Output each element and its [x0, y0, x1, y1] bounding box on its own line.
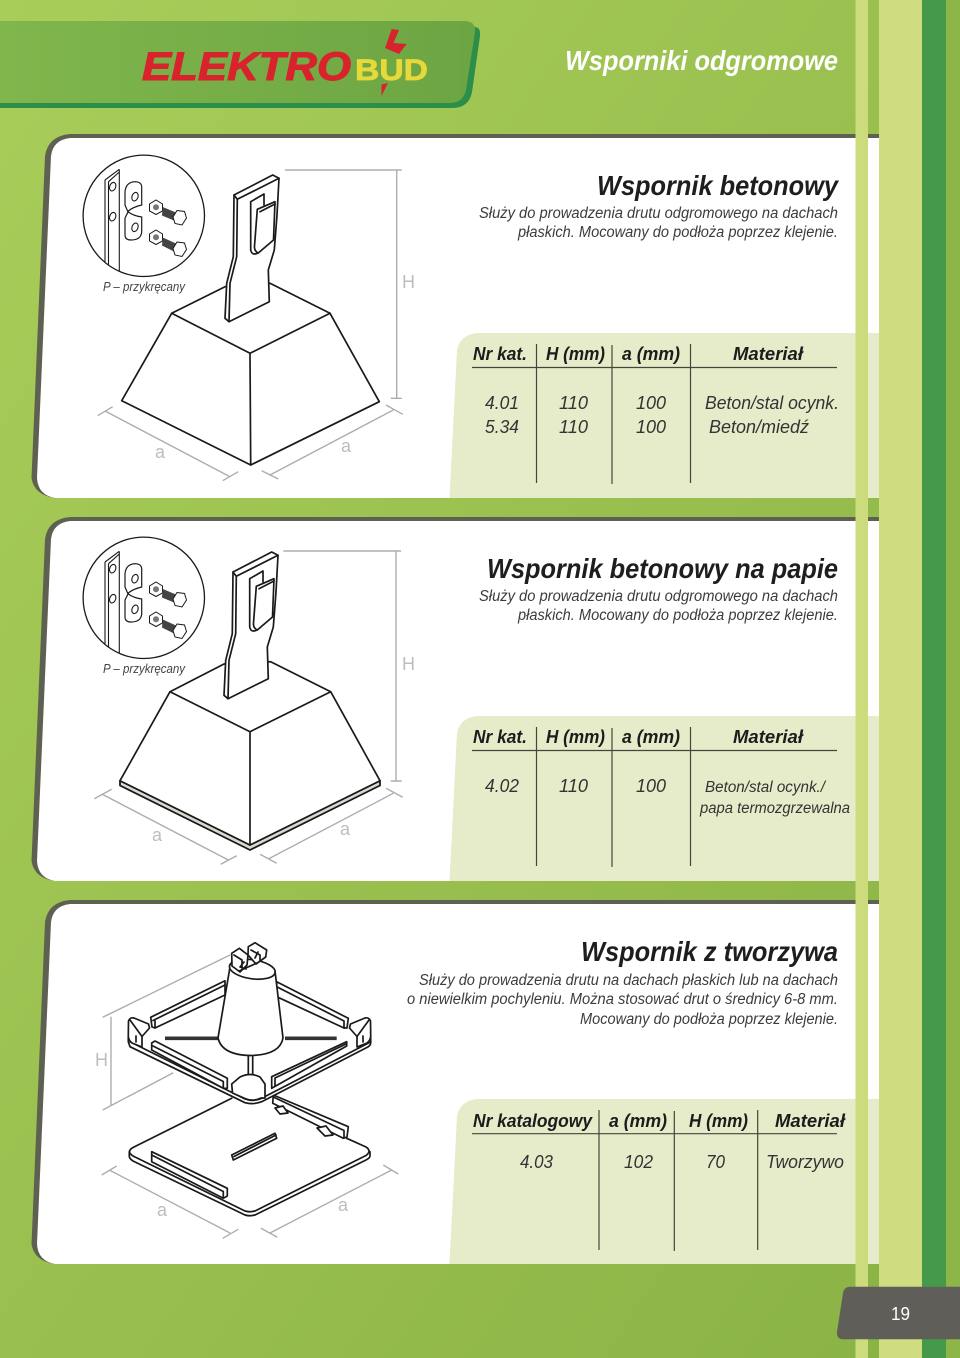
table 2: Materiał [733, 727, 804, 747]
table 1 [472, 344, 839, 484]
icon: mounting detail 2 [83, 537, 204, 658]
dimensions 1: a [341, 436, 352, 456]
table 2: H (mm) [546, 727, 605, 747]
dimensions 1 [98, 170, 415, 481]
panel: Wspornik betonowy na papie [32, 517, 879, 881]
dimensions 2 [94, 551, 415, 864]
table 2: 100 [636, 776, 666, 796]
rails of the frame [151, 981, 348, 1088]
table 3: 102 [624, 1152, 653, 1172]
table 1: Materiał [733, 344, 804, 364]
description 2: Służy do prowadzenia drutu odgromowego na dachach [479, 588, 838, 605]
drawing: concrete support [122, 175, 379, 465]
cone [218, 967, 283, 1056]
panel: Wspornik z tworzywa [32, 900, 879, 1264]
header band [0, 21, 480, 108]
table 3: 70 [706, 1152, 725, 1172]
table 2: Beton/stal ocynk./ [705, 779, 827, 796]
table 3: Tworzywo [766, 1152, 844, 1172]
dimensions 1: a [155, 442, 166, 462]
table 3 [472, 1110, 846, 1251]
table 2 [472, 727, 850, 867]
page number tab: 19 [891, 1303, 910, 1324]
corners of the frame [128, 1018, 371, 1047]
heading: Wspornik betonowy na papie: Wspornik betonowy na papie [487, 553, 838, 584]
description 1: płaskich. Mocowany do podłoża poprzez klejenie. [517, 224, 838, 241]
table 1: Nr kat. [473, 344, 527, 364]
table 2: papa termozgrzewalna [699, 800, 850, 817]
table 2: Nr kat. [473, 727, 527, 747]
table background 2 [450, 716, 879, 881]
description 2: płaskich. Mocowany do podłoża poprzez klejenie. [517, 607, 838, 624]
cone head [228, 943, 276, 982]
table 1: 5.34 [485, 417, 519, 437]
table 1: 4.01 [485, 393, 519, 413]
table 1: a (mm) [622, 344, 680, 364]
table background 3 [450, 1099, 879, 1264]
description 3: Służy do prowadzenia drutu na dachach płaskich lub na dachach [419, 972, 838, 989]
vertical stripes [856, 0, 960, 1358]
dimensions 3: H [95, 1050, 108, 1070]
table 2: 110 [559, 776, 588, 796]
logo: Elektrobud [142, 29, 428, 96]
table 2: 4.02 [485, 776, 519, 796]
table 2: a (mm) [622, 727, 680, 747]
table 1: Beton/miedź [709, 417, 809, 437]
table 3: Nr katalogowy [473, 1111, 593, 1131]
table 3: 4.03 [520, 1152, 553, 1172]
icon: mounting detail 1 [83, 155, 204, 276]
table 1: Beton/stal ocynk. [705, 393, 839, 413]
table 3: a (mm) [609, 1111, 667, 1131]
drawing: plastic support [128, 943, 371, 1216]
title: Wsporniki odgromowe [565, 45, 838, 76]
dimensions 2: H [402, 654, 415, 674]
panel: Wspornik betonowy [32, 134, 879, 498]
caption 2: P – przykręcany [103, 662, 186, 676]
slots [165, 1037, 337, 1040]
logo: Elektrobud: ELEKTRO [142, 45, 351, 89]
table 3: Materiał [775, 1111, 846, 1131]
heading: Wspornik z tworzywa: Wspornik z tworzywa [581, 936, 838, 967]
dimensions 3: a [157, 1200, 168, 1220]
dimensions 3 [95, 955, 398, 1238]
dimensions 1: H [402, 272, 415, 292]
frame [128, 943, 371, 1104]
page number tab [837, 1287, 960, 1339]
dimensions 2: a [152, 825, 163, 845]
table background 1 [450, 333, 879, 498]
drawing: concrete support on roofing felt [120, 552, 380, 850]
logo: Elektrobud: BUD [355, 54, 428, 87]
description 3: Mocowany do podłoża poprzez klejenie. [580, 1011, 838, 1028]
table 1: H (mm) [546, 344, 605, 364]
dimensions 2: a [340, 819, 351, 839]
description 1: Służy do prowadzenia drutu odgromowego na dachach [479, 205, 838, 222]
table 1: 110 [559, 393, 588, 413]
table 1: 100 [636, 417, 666, 437]
heading: Wspornik betonowy: Wspornik betonowy [597, 170, 840, 201]
table 1: 100 [636, 393, 666, 413]
dimensions 3: a [338, 1195, 349, 1215]
table 1: 110 [559, 417, 588, 437]
table 3: H (mm) [689, 1111, 748, 1131]
caption 1: P – przykręcany [103, 280, 186, 294]
base plate [129, 1095, 370, 1216]
description 3: o niewielkim pochyleniu. Można stosować drut o średnicy 6-8 mm. [407, 991, 838, 1008]
stem and hub [232, 1055, 265, 1100]
